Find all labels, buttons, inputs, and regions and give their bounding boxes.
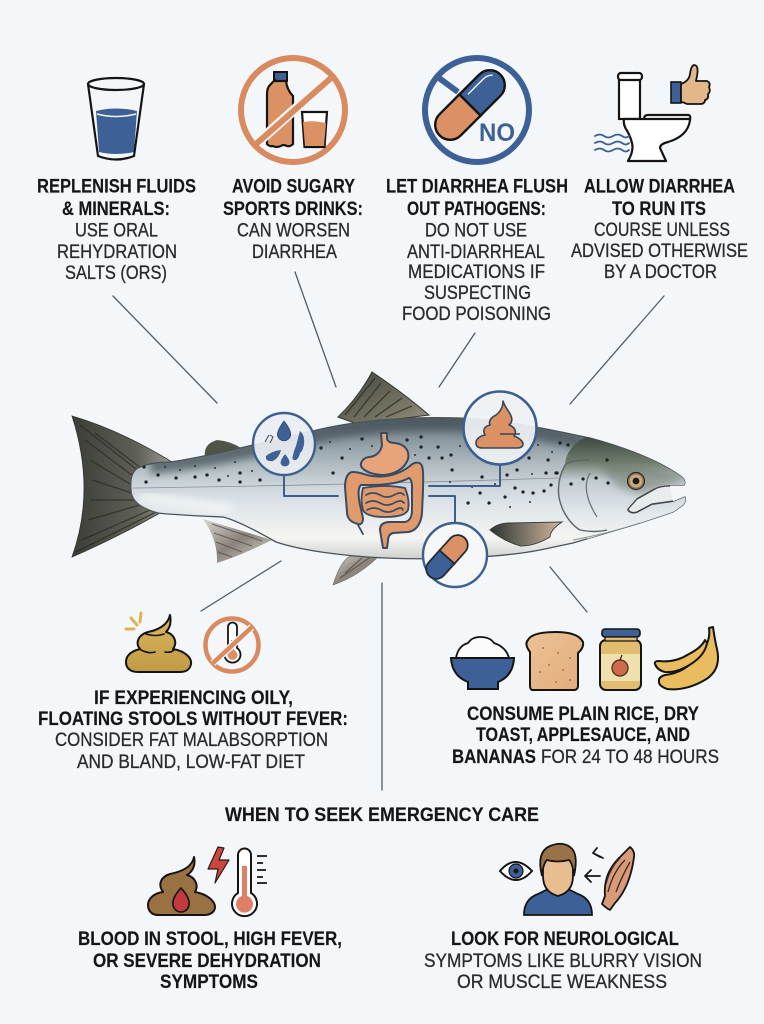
text: let diarrhea flush: SUSPECTING <box>424 282 531 304</box>
icon: arrows <box>585 848 603 882</box>
icon: rice bowl <box>451 637 514 689</box>
text: avoid sugary drinks: CAN WORSEN <box>237 220 350 242</box>
text: oily stools <box>38 687 348 773</box>
icon: stool type circle with droplets <box>253 413 315 475</box>
fish pectoral fin <box>490 522 562 546</box>
text: replenish fluids: REPLENISH FLUIDS <box>37 176 196 198</box>
text: oily stools: AND BLAND, LOW-FAT DIET <box>77 751 305 773</box>
fish head and markings <box>133 423 700 540</box>
text: avoid sugary drinks: SPORTS DRINKS: <box>223 198 363 220</box>
text: allow diarrhea to run: TO RUN ITS <box>612 198 706 220</box>
text: avoid sugary drinks: AVOID SUGARY <box>232 176 355 198</box>
leader lines <box>113 272 664 790</box>
text: avoid sugary drinks: DIARRHEA <box>252 241 337 263</box>
text: allow diarrhea to run: ALLOW DIARRHEA <box>584 176 735 198</box>
panel: let diarrhea flush <box>386 58 568 325</box>
icon: no bottle and cup <box>241 58 345 162</box>
panel: avoid sugary drinks <box>223 58 363 263</box>
fish mouth <box>628 486 673 513</box>
panel: replenish fluids <box>37 78 196 284</box>
panel: allow diarrhea to run <box>571 65 748 283</box>
fish eye <box>628 472 644 490</box>
text: avoid sugary drinks <box>223 176 363 263</box>
panel: BRAT diet <box>451 627 719 768</box>
salmon illustration <box>72 372 700 587</box>
icon: toast <box>526 632 583 690</box>
text: blood in stool: OR SEVERE DEHYDRATION <box>93 950 321 972</box>
icon: pill circle <box>422 523 487 587</box>
text: blood in stool <box>78 928 342 993</box>
icon: eye <box>500 862 532 880</box>
icon: applesauce jar <box>600 629 641 690</box>
icon: stool circle <box>464 392 536 464</box>
heading: when to seek emergency care: WHEN TO SEEK EMERGENCY CARE <box>225 804 539 826</box>
text: oily stools: IF EXPERIENCING OILY, <box>94 687 293 709</box>
icon: lightning bolt <box>208 847 229 883</box>
panel: neurological symptoms <box>424 844 702 993</box>
text: replenish fluids: REHYDRATION <box>57 241 177 263</box>
icon: toilet with thumbs up <box>595 65 710 161</box>
panel: blood in stool <box>78 847 342 993</box>
text: BRAT diet: TOAST, APPLESAUCE, AND <box>476 724 690 746</box>
text: replenish fluids <box>37 176 196 284</box>
text: neurological symptoms: OR MUSCLE WEAKNESS <box>457 971 667 993</box>
icon: no anti-diarrheal pill <box>425 58 529 162</box>
text: allow diarrhea to run: BY A DOCTOR <box>604 261 717 283</box>
text: replenish fluids: SALTS (ORS) <box>65 262 167 284</box>
fish fins <box>72 372 429 585</box>
text: neurological symptoms <box>424 928 702 993</box>
connector lines <box>284 465 500 522</box>
icon: oily stool <box>126 613 191 672</box>
text: BRAT diet: CONSUME PLAIN RICE, DRY <box>467 703 699 725</box>
icon: stool with blood drop <box>148 857 215 915</box>
text: BRAT diet: BANANAS <box>452 746 536 768</box>
text: allow diarrhea to run: COURSE UNLESS <box>594 219 730 241</box>
text: replenish fluids: & MINERALS: <box>62 198 170 220</box>
text: blood in stool: SYMPTOMS <box>160 971 258 993</box>
icon: thermometer <box>232 849 267 916</box>
text: allow diarrhea to run <box>571 176 748 283</box>
icon: bananas <box>655 627 718 689</box>
text: let diarrhea flush: FOOD POISONING <box>402 303 551 325</box>
text: let diarrhea flush: LET DIARRHEA FLUSH <box>386 176 568 198</box>
text: let diarrhea flush: MEDICATIONS IF <box>408 261 545 283</box>
text: let diarrhea flush: OUT PATHOGENS: <box>407 198 546 220</box>
text: neurological symptoms: LOOK FOR NEUROLOGICAL <box>451 928 679 950</box>
text: oily stools: FLOATING STOOLS WITHOUT FEVER: <box>38 708 348 730</box>
icon: no anti-diarrheal pill: NO <box>479 119 515 147</box>
icon: person <box>524 844 592 915</box>
icon: digestive tract <box>345 433 423 548</box>
icon: glass of water <box>88 78 144 160</box>
icon: muscle <box>602 847 634 910</box>
text: let diarrhea flush: ANTI-DIARRHEAL <box>407 241 545 263</box>
panel: oily stools <box>38 613 348 773</box>
text: replenish fluids: USE ORAL <box>75 220 158 242</box>
text: oily stools: CONSIDER FAT MALABSORPTION <box>55 729 328 751</box>
text: neurological symptoms: SYMPTOMS LIKE BLURRY VISION <box>424 950 702 972</box>
text: let diarrhea flush: DO NOT USE <box>425 220 527 242</box>
text: blood in stool: BLOOD IN STOOL, HIGH FEVER, <box>78 928 342 950</box>
text: let diarrhea flush <box>386 176 568 325</box>
text: BRAT diet <box>452 703 719 768</box>
fish body <box>131 418 685 559</box>
icon: no fever thermometer <box>206 618 258 672</box>
text: BRAT diet: FOR 24 TO 48 HOURS <box>541 746 719 768</box>
